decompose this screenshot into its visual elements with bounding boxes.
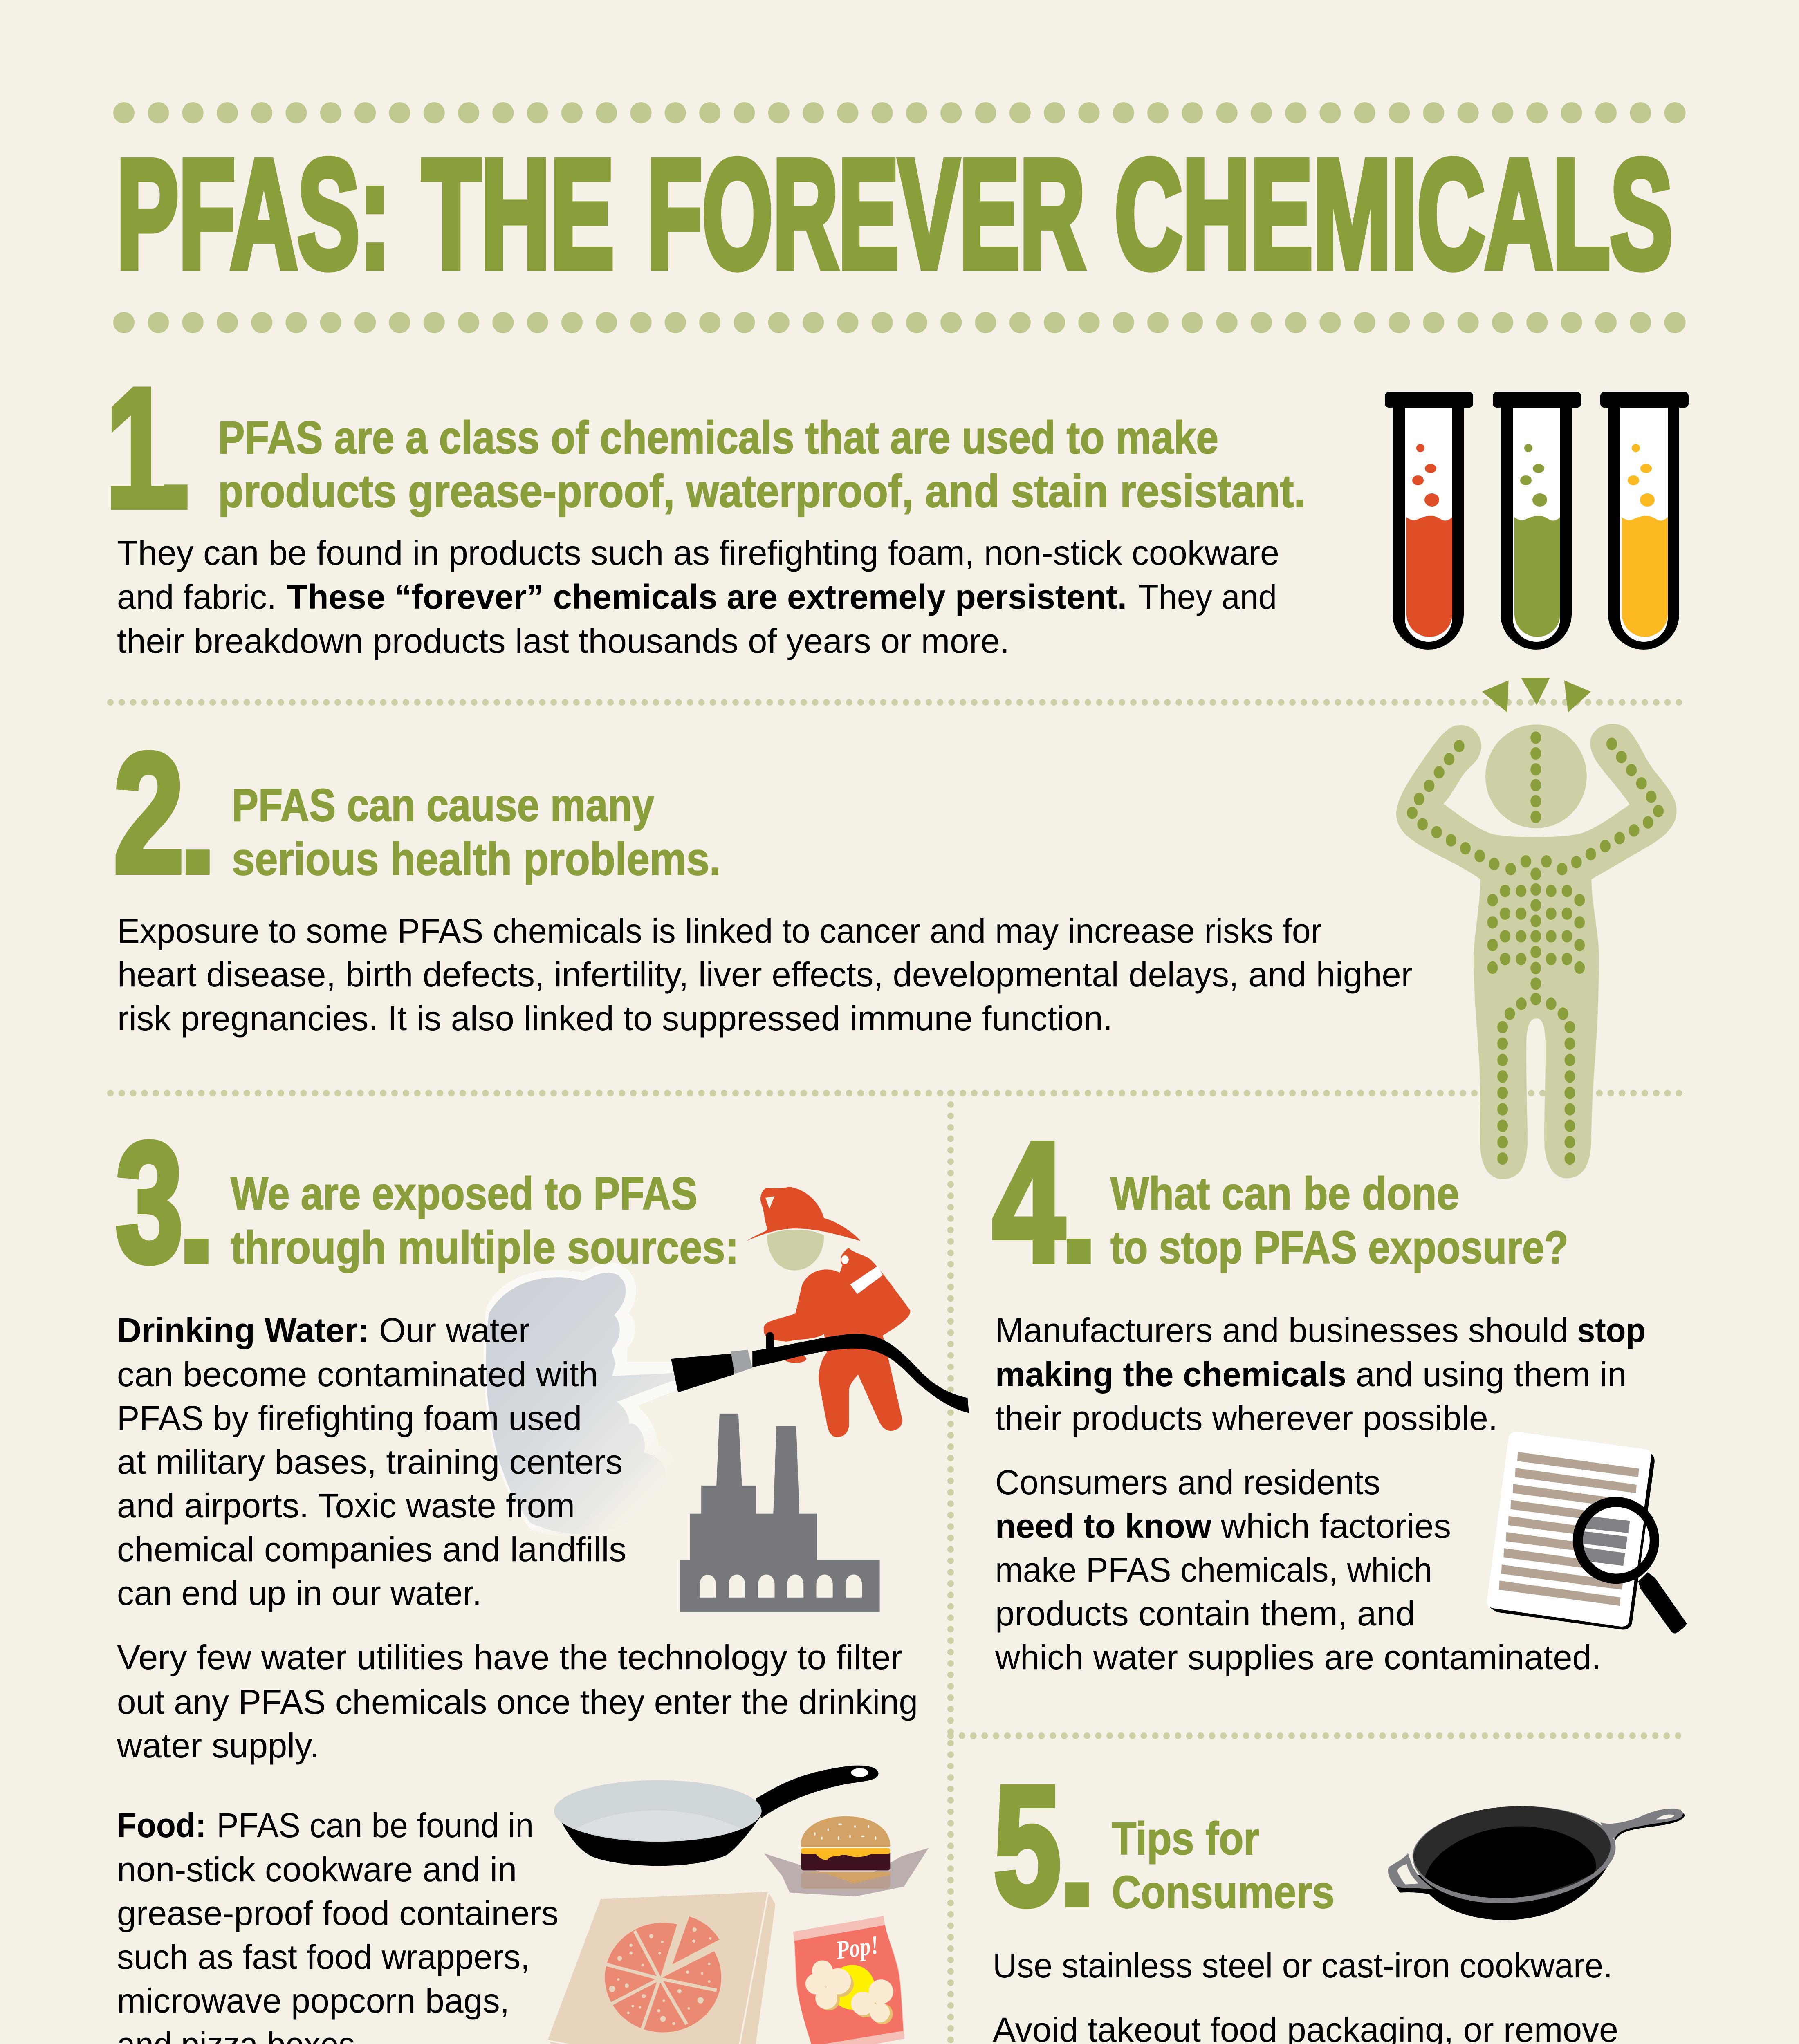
text block: consumers [995,1463,1601,1676]
heading 4: to stop PFAS exposure? [1110,1222,1568,1273]
heading 5: Consumers [1112,1867,1335,1918]
text block: consumers: which factories [1220,1507,1451,1545]
heading 3 [231,1168,739,1273]
number 3: . [173,1110,220,1300]
text block: tips: Use stainless steel or cast-iron cookware. [993,1946,1613,1985]
number 3: 3 [116,1107,183,1297]
panel: section 1 [106,353,1689,660]
body text 1: their breakdown products last thousands of years or more. [117,622,1009,660]
text block: manufacturers: stop [1577,1311,1646,1349]
number 2: 2 [114,718,184,908]
text block: water utilities: water supply. [117,1726,319,1765]
text block: manufacturers: making the chemicals [995,1355,1346,1394]
icon: factory [680,1414,880,1612]
icon: three test tubes [1385,392,1689,650]
text block: food: Food: [117,1806,206,1845]
title: FOREVER [647,128,1085,300]
heading 1 [218,412,1306,517]
text block: drinking water: and airports. Toxic waste from [117,1486,575,1525]
heading 3: We are exposed to PFAS [231,1168,698,1219]
test tube yellow [1600,392,1689,650]
text block: drinking water: can end up in our water. [117,1574,482,1612]
icon: popcorn bag: Pop! [834,1930,881,1965]
text block: consumers: Consumers and residents [995,1463,1380,1502]
heading 4 [1110,1168,1568,1273]
text block: food: PFAS can be found in [217,1806,534,1845]
text block: food: such as fast food wrappers, [117,1938,530,1976]
text block: food: microwave popcorn bags, [117,1981,509,2020]
icon: document under magnifying glass [1487,1432,1687,1634]
text block: drinking water: at military bases, training centers [117,1443,623,1481]
body text 2: Exposure to some PFAS chemicals is linked to cancer and may increase risks for [117,912,1322,950]
text block: water utilities: out any PFAS chemicals once they enter the drinking [117,1683,918,1721]
number 4: . [1055,1110,1102,1300]
title: THE [422,128,614,300]
panel: section 3 [116,1107,969,2044]
heading 1: PFAS are a class of chemicals that are used to make [218,412,1218,463]
text block: manufacturers: and using them in [1356,1355,1626,1394]
text block: food: non-stick cookware and in [117,1850,517,1889]
heading 2 [232,780,721,885]
number 1: . [152,356,199,546]
body text 1: They can be found in products such as firefighting foam, non-stick cookware [117,533,1279,572]
number 5: 5 [994,1750,1061,1940]
text block: drinking water: Our water [379,1311,530,1349]
heading 5 [1112,1813,1335,1918]
text block: water utilities: Very few water utilities have the technology to filter [117,1638,902,1676]
heading 2: serious health problems. [232,834,721,885]
body text 1: and fabric. [117,578,276,616]
number 5: . [1054,1754,1101,1943]
text block: drinking water: chemical companies and landfills [117,1530,626,1569]
text block: drinking water [117,1311,626,1612]
panel: section 2 [114,678,1677,1179]
title: PFAS: [117,128,390,300]
number 4: 4 [993,1107,1065,1297]
body text 1 [117,533,1279,660]
text block: tips [993,1946,1676,2044]
text block: consumers: products contain them, and [995,1594,1415,1633]
icon: cast iron skillet [1388,1806,1685,1920]
icon: popcorn bag [793,1916,904,2044]
heading 3: through multiple sources: [231,1222,739,1273]
text block: drinking water: PFAS by firefighting foam used [117,1399,582,1437]
text block: drinking water: Drinking Water: [117,1311,369,1349]
panel: section 5 [990,1750,1685,2044]
panel: section 4 [993,1107,1687,1676]
body text 1: They and [1138,578,1277,616]
body text 2: heart disease, birth defects, infertility, liver effects, developmental delays, and higher [117,955,1413,994]
text block: consumers: which water supplies are contaminated. [995,1638,1601,1676]
body text 2: risk pregnancies. It is also linked to suppressed immune function. [117,999,1113,1038]
body text 2 [117,912,1413,1038]
icon: burger in wrapper [764,1816,929,1896]
heading 2: PFAS can cause many [232,780,654,831]
number 1: 1 [106,353,170,542]
text block: consumers: need to know [995,1507,1212,1545]
heading 5: Tips for [1112,1813,1259,1864]
text block: water utilities [117,1638,918,1765]
text block: food: grease-proof food containers [117,1894,559,1932]
heading 1: products grease-proof, waterproof, and stain resistant. [218,466,1306,517]
icon: firefighter with hose [671,1187,969,1437]
title [117,128,1673,300]
text block: drinking water: can become contaminated with [117,1355,598,1394]
body text 1: These “forever” chemicals are extremely persistent. [287,578,1127,616]
text block: consumers: make PFAS chemicals, which [995,1551,1432,1589]
icon: human figure with dotted organs [1396,678,1677,1179]
text block: manufacturers: their products wherever possible. [995,1399,1498,1437]
text block: food [117,1806,559,2044]
heading 4: What can be done [1110,1168,1459,1219]
text block: manufacturers: Manufacturers and businesses should [995,1311,1568,1349]
test tube green [1493,392,1581,650]
icon: foam spray cloud [483,1263,678,1538]
icon: pizza box [548,1892,776,2044]
number 2: . [174,721,221,911]
test tube red [1385,392,1473,650]
text block: manufacturers [995,1311,1646,1437]
icon: non-stick frying pan [554,1766,879,1866]
